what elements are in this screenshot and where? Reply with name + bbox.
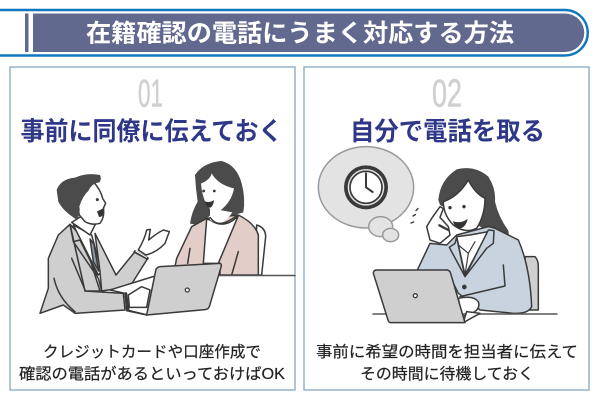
desk edge: [373, 313, 557, 315]
caption: その時間に待機しておく: [360, 365, 534, 383]
illustration: woman on phone: [318, 147, 557, 323]
laptop: [110, 263, 221, 315]
woman: [415, 168, 538, 317]
caption: クレジットカードや口座作成で: [43, 343, 261, 361]
laptop: [373, 270, 480, 323]
man's hand on keyboard: [128, 287, 150, 307]
sound marks: [411, 208, 418, 223]
title banner: [0, 10, 588, 56]
caption: [19, 343, 286, 383]
panel: method 01: [10, 67, 295, 390]
thought bubble with clock: [318, 147, 414, 242]
title text: 在籍確認の電話にうまく対応する方法: [86, 20, 515, 48]
illustration: colleagues talking: [40, 161, 295, 315]
heading: tell a colleague: 事前に同僚に伝えておく: [20, 118, 282, 146]
woman: [175, 161, 266, 275]
man's raised hand: [138, 229, 169, 255]
table edge: [218, 274, 295, 276]
chair: [525, 257, 538, 310]
icon: clock: [344, 165, 388, 209]
caption: 事前に希望の時間を担当者に伝えて: [316, 343, 578, 361]
heading: take the call yourself: 自分で電話を取る: [350, 118, 545, 146]
number 02: 02: [432, 72, 462, 116]
hand holding phone: [427, 207, 450, 243]
man: [40, 174, 169, 313]
caption: [316, 343, 578, 383]
hand on keyboard: [458, 297, 479, 317]
panel: method 02: [304, 67, 589, 390]
caption: 確認の電話があるといっておけばOK: [19, 365, 286, 383]
number 01: 01: [138, 72, 163, 116]
